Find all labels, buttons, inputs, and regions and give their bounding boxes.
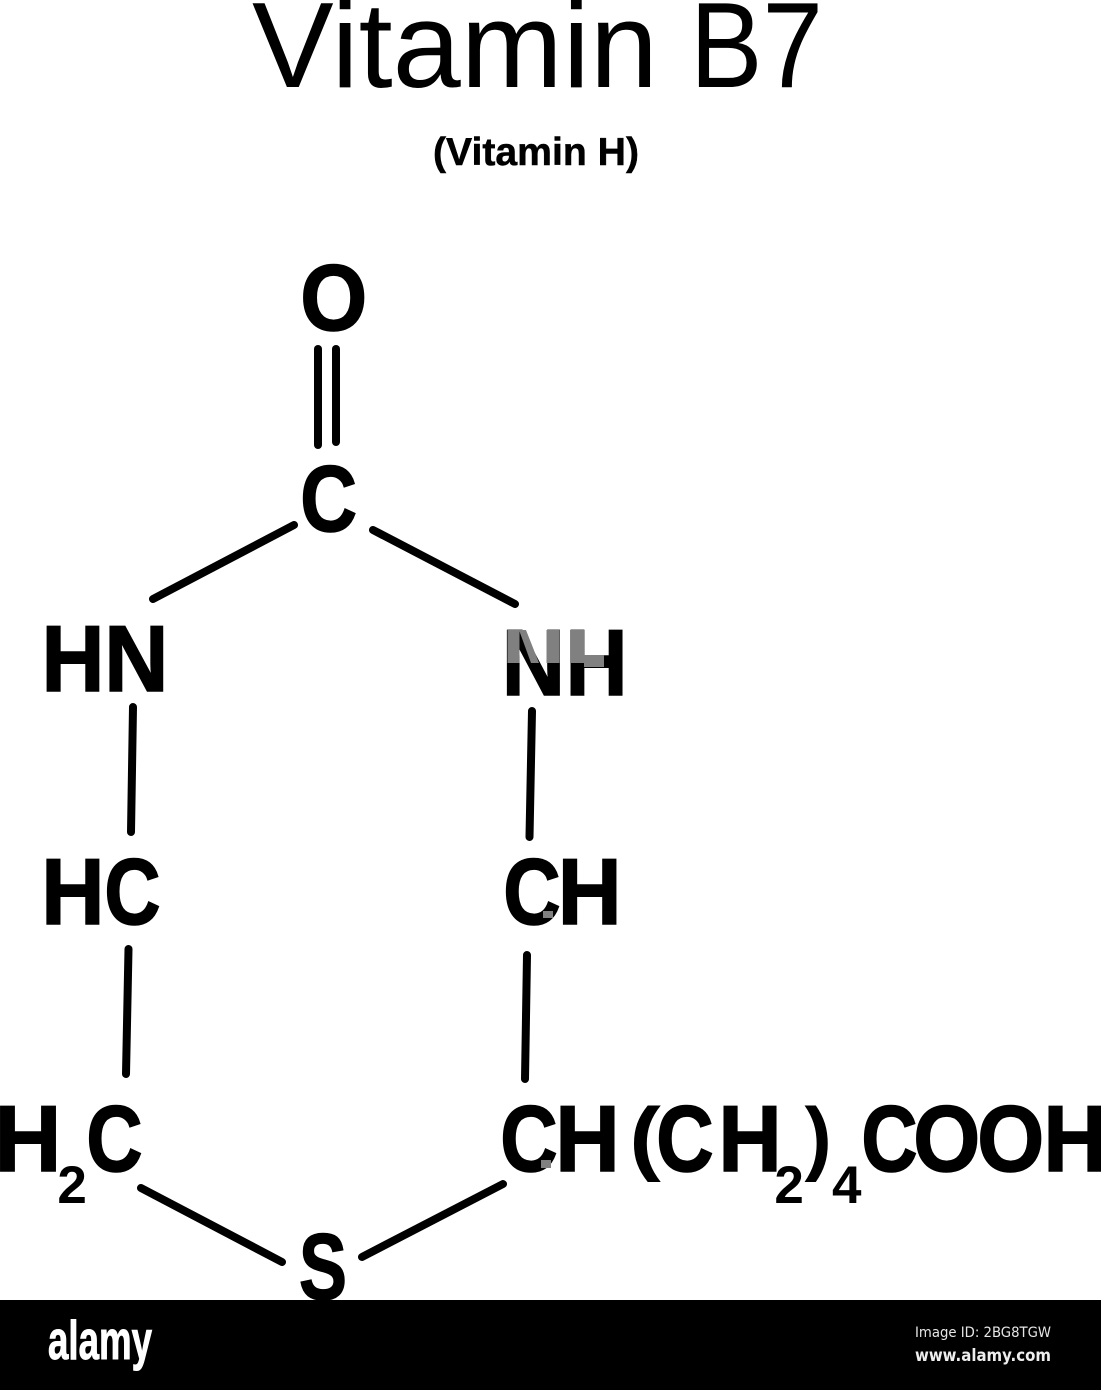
image id: Image ID: 2BG8TGW [915,1325,1051,1341]
atom: CH [503,839,622,944]
atom: CH side chain: C [861,1086,918,1191]
atom: H2C [0,1086,143,1215]
footer bar [0,1300,1101,1390]
atom: HC: H [41,839,105,944]
logo: alamy: alamy [48,1309,152,1371]
atom: H2C: C [86,1086,143,1191]
atom: CH side chain: ) [804,1092,832,1183]
atom: HC: C [104,839,161,944]
bonds [126,349,532,1262]
atom: CH side chain: H [718,1086,782,1191]
atom: HN: N [104,606,168,711]
atom: CH side chain: ( [629,1092,662,1183]
atom: HN: H [42,606,104,711]
atom: HC [41,839,161,944]
atom: CH side chain: 4 [832,1156,862,1215]
atom: CH: C [503,839,561,944]
atom: CH side chain [500,1086,1101,1215]
atom: CH side chain: 2 [774,1156,804,1215]
atom: NH: H [566,610,628,715]
atom: NH [502,610,628,715]
atom: CH: H [558,839,622,944]
atom: O: O [300,245,367,350]
atom: CH side chain: H [555,1086,620,1191]
atom: CH side chain: C [500,1086,558,1191]
molecular structure [0,245,1101,1319]
atom: CH side chain: C [656,1086,714,1191]
website: www.alamy.com [915,1346,1051,1365]
atom: NH: N [502,610,565,715]
subtitle: (Vitamin H) [433,131,639,174]
atom: HN [42,606,168,711]
atom: C: C [300,446,357,551]
atom: CH side chain: O [977,1086,1044,1191]
atom: CH side chain: O [913,1086,980,1191]
atom: H2C: 2 [57,1156,87,1215]
atom: S: S [299,1214,347,1319]
